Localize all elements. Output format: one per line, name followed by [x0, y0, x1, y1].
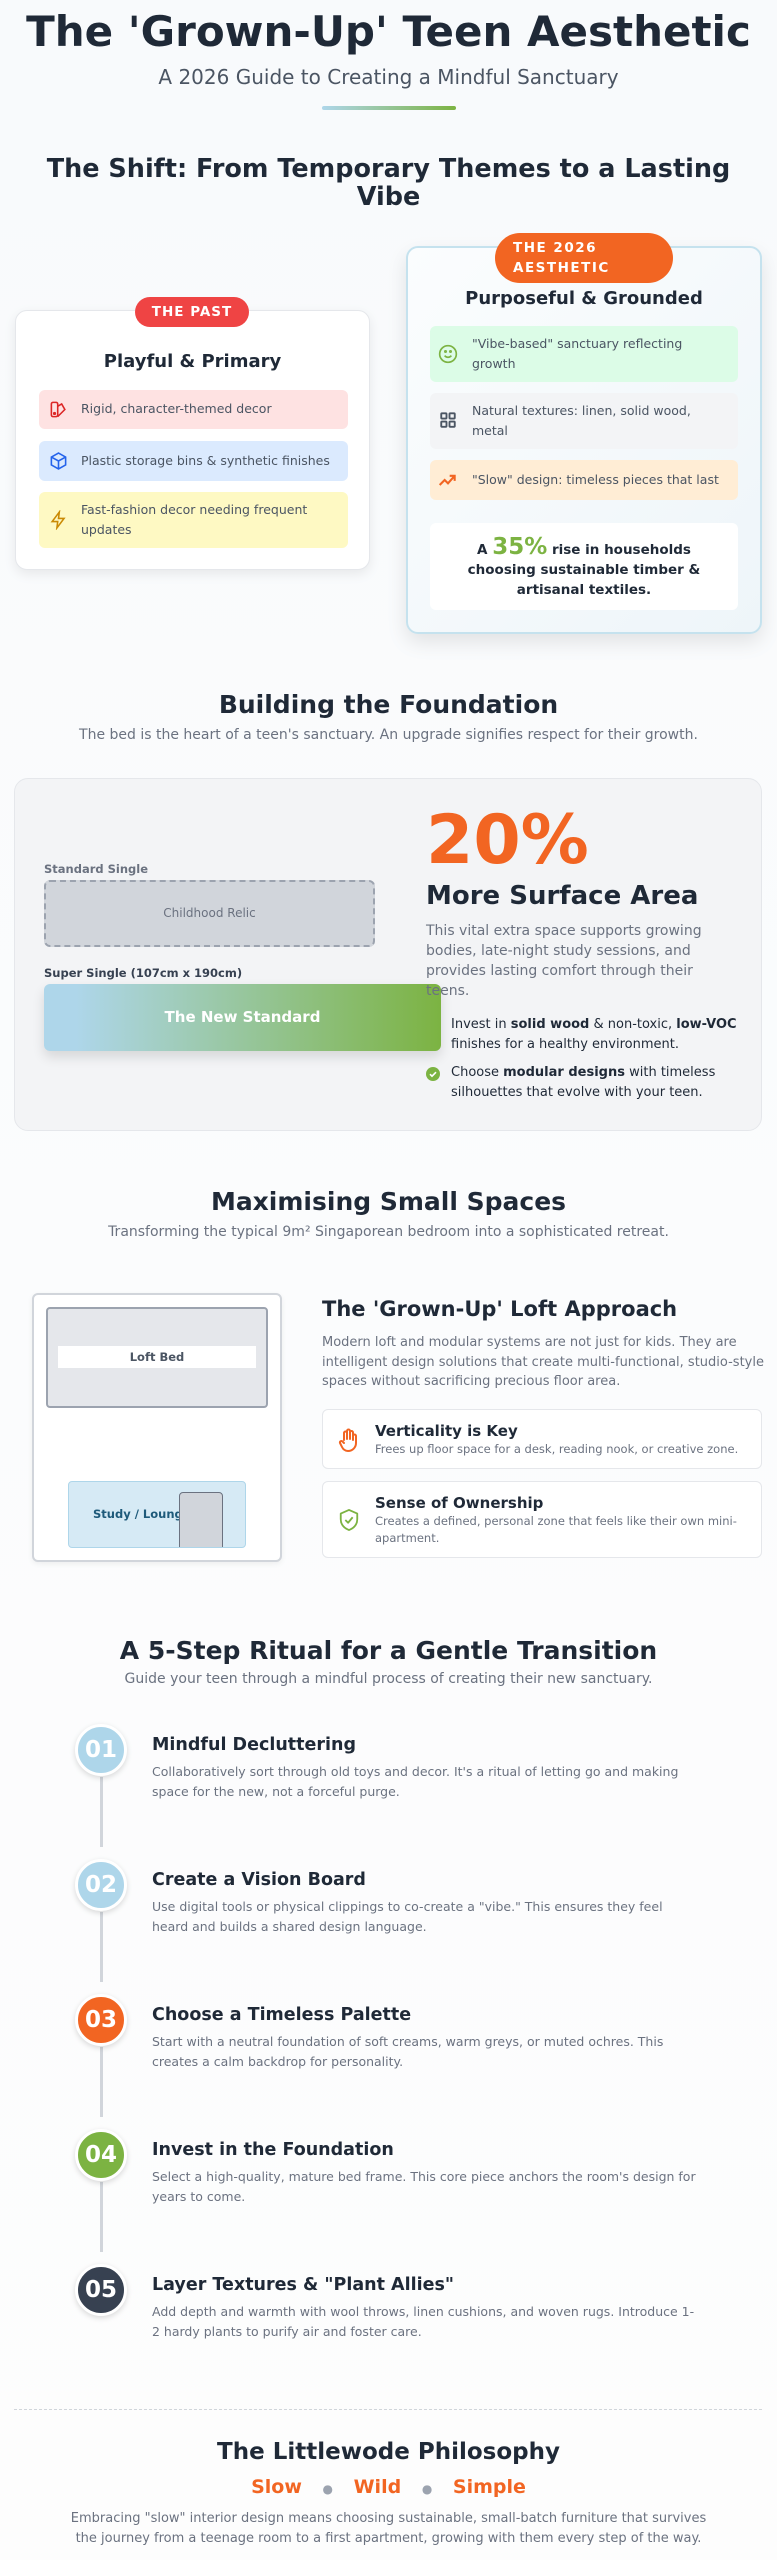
heading: playful & primary: Playful & Primary: [104, 351, 281, 372]
step 03: Choose a Timeless Palette: [152, 2005, 411, 2025]
card: ownership: [322, 1481, 762, 1558]
footer heading: The Littlewode Philosophy: [217, 2439, 560, 2465]
step 02: [73, 1862, 663, 1934]
stat callout: 35%: choosing sustainable timber &: [468, 562, 700, 578]
heading: more surface area: More Surface Area: [426, 881, 698, 911]
badge: 2026 aesthetic: AESTHETIC: [513, 260, 610, 276]
subheading: small spaces: Transforming the typical 9m² Singaporean bedroom into a sophisticated retreat.: [108, 1224, 669, 1240]
panel: 2026 aesthetic: [406, 246, 762, 634]
bed: new standard: The New Standard: [165, 1008, 320, 1026]
step 04: [73, 2132, 696, 2204]
step 03: 03: [85, 2007, 117, 2033]
item: vibe-based: [430, 326, 738, 382]
study / lounge zone: Study / Lounge: [93, 1507, 191, 1521]
item: vibe-based: growth: [472, 356, 516, 371]
heading: the shift: [46, 154, 730, 212]
step 05: 05: [85, 2277, 117, 2303]
step 01: Collaboratively sort through old toys and decor. It's a ritual of letting go and making: [152, 1764, 678, 1779]
title: The 'Grown-Up' Teen Aesthetic: [26, 7, 751, 56]
item: natural textures: Natural textures: linen, solid wood,: [472, 403, 691, 418]
step 02: 02: [85, 1872, 117, 1898]
paragraph: loft: spaces without sacrificing precious floor area.: [322, 1374, 620, 1389]
heading: the shift: Vibe: [357, 182, 420, 212]
heading: loft approach: The 'Grown-Up' Loft Approach: [322, 1297, 677, 1321]
step 04: 04: [85, 2142, 117, 2168]
badge: 2026 aesthetic: THE 2026: [513, 240, 597, 256]
paragraph: extra space: bodies, late-night study sessions, and: [426, 943, 691, 959]
bed: childhood relic: [44, 880, 375, 947]
heading: purposeful: Purposeful & Grounded: [465, 288, 703, 309]
paragraph: loft: intelligent design solutions that create multi-functional, studio-style: [322, 1354, 764, 1370]
card: ownership: Creates a defined, personal zone that feels like their own mini-: [375, 1514, 737, 1528]
step 04: Invest in the Foundation: [152, 2140, 394, 2160]
step 05: Add depth and warmth with wool throws, linen cushions, and woven rugs. Introduce 1-: [152, 2304, 694, 2319]
item: natural textures: metal: [472, 423, 508, 438]
bullet: modular designs: Choose modular designs with timeless: [451, 1065, 715, 1080]
paragraph: loft: [322, 1335, 764, 1389]
card: verticality: Frees up floor space for a desk, reading nook, or creative zone.: [375, 1442, 738, 1456]
bed: new standard: [44, 984, 441, 1051]
footer: [14, 2409, 762, 2546]
step 05: 2 hardy plants to purify air and foster care.: [152, 2324, 422, 2339]
step 04: years to come.: [152, 2189, 245, 2204]
step 02: Use digital tools or physical clippings to co-create a "vibe." This ensures they feel: [152, 1899, 663, 1914]
study / lounge zone: [68, 1481, 246, 1548]
step 01: Mindful Decluttering: [152, 1735, 356, 1755]
card: verticality: Verticality is Key: [375, 1422, 518, 1440]
heading: the shift: The Shift: From Temporary Themes to a Lasting: [47, 154, 730, 184]
bed: childhood relic: Childhood Relic: [163, 906, 256, 920]
gradient divider: [322, 106, 456, 110]
loft bed: Loft Bed: [130, 1350, 184, 1364]
step 02: heard and builds a shared design language.: [152, 1919, 427, 1934]
bullet: solid wood: [451, 1017, 737, 1052]
paragraph: loft: Modern loft and modular systems are not just for kids. They are: [322, 1335, 737, 1350]
stat callout: 35%: artisanal textiles.: [517, 582, 651, 598]
stat callout: 35%: A 35% rise in households: [477, 534, 691, 560]
panel: the past: [15, 310, 370, 570]
step 01: [73, 1727, 678, 1799]
badge: 2026 aesthetic: [495, 233, 673, 283]
step 05: Layer Textures & "Plant Allies": [152, 2275, 454, 2295]
step 01: space for the new, not a forceful purge.: [152, 1784, 400, 1799]
step 03: creates a calm backdrop for personality.: [152, 2054, 403, 2069]
item: fast fashion: [39, 492, 348, 548]
item: rigid decor: Rigid, character-themed decor: [81, 401, 272, 416]
subheading: ritual: Guide your teen through a mindful process of creating their new sanctuary.: [125, 1671, 652, 1687]
item: fast fashion: Fast-fashion decor needing frequent: [81, 502, 307, 517]
subtitle: A 2026 Guide to Creating a Mindful Sanctuary: [158, 65, 619, 89]
item: slow design: "Slow" design: timeless pieces that last: [472, 472, 719, 487]
paragraph: extra space: teens.: [426, 983, 469, 999]
step 01: 01: [85, 1737, 117, 1763]
paragraph: extra space: This vital extra space supports growing: [426, 923, 702, 939]
subheading: foundation: The bed is the heart of a teen's sanctuary. An upgrade signifies respect for their growth.: [79, 727, 698, 743]
bullet: solid wood: Invest in solid wood & non-toxic, low-VOC: [451, 1017, 737, 1032]
stat callout: 35%: [430, 523, 738, 610]
values: slow wild simple: Slow ● Wild ● Simple: [251, 2476, 526, 2498]
card: ownership: Sense of Ownership: [375, 1494, 543, 1512]
card: ownership: apartment.: [375, 1531, 439, 1545]
item: rigid decor: [39, 390, 348, 429]
bullet: solid wood: finishes for a healthy environment.: [451, 1037, 679, 1052]
bullet: modular designs: silhouettes that evolve with your teen.: [451, 1085, 703, 1100]
label: standard single: Standard Single: [44, 862, 148, 876]
heading: maximising small spaces: Maximising Small Spaces: [211, 1187, 566, 1216]
item: plastic storage: Plastic storage bins & synthetic finishes: [81, 453, 330, 468]
bullet: modular designs: [426, 1065, 715, 1100]
label: super single: Super Single (107cm x 190cm): [44, 966, 242, 980]
footer paragraph: [71, 2511, 706, 2546]
item: fast fashion: updates: [81, 522, 132, 537]
card: verticality: [322, 1409, 762, 1469]
loft bed: [46, 1307, 268, 1408]
step 03: Start with a neutral foundation of soft creams, warm greys, or muted ochres. This: [152, 2034, 663, 2049]
badge: the past: THE PAST: [152, 304, 232, 320]
item: plastic storage: [39, 441, 348, 481]
footer paragraph: Embracing "slow" interior design means choosing sustainable, small-batch furniture that survives: [71, 2511, 706, 2526]
icon: hand: [338, 1428, 357, 1452]
step 05: [73, 2267, 694, 2339]
chair: [179, 1492, 223, 1552]
badge: the past: [135, 297, 249, 327]
step 04: Select a high-quality, mature bed frame. This core piece anchors the room's design for: [152, 2169, 696, 2184]
heading: 5-step ritual: A 5-Step Ritual for a Gentle Transition: [120, 1636, 657, 1665]
diagram: room layout: [32, 1293, 282, 1562]
step 02: Create a Vision Board: [152, 1870, 366, 1890]
paragraph: extra space: [426, 923, 702, 999]
stat: 20%: 20%: [426, 801, 589, 880]
item: vibe-based: "Vibe-based" sanctuary reflecting: [472, 336, 682, 351]
paragraph: extra space: provides lasting comfort through their: [426, 963, 693, 979]
heading: building the foundation: Building the Foundation: [219, 690, 558, 719]
icon: check: [426, 1067, 440, 1081]
footer paragraph: the journey from a teenage room to a first apartment, growing with them every step of the way.: [76, 2530, 701, 2546]
item: slow design: [430, 460, 738, 500]
icon: shield: [340, 1509, 358, 1531]
panel: bed comparison: [14, 778, 762, 1131]
step 03: [73, 1997, 663, 2069]
item: natural textures: [430, 393, 738, 449]
